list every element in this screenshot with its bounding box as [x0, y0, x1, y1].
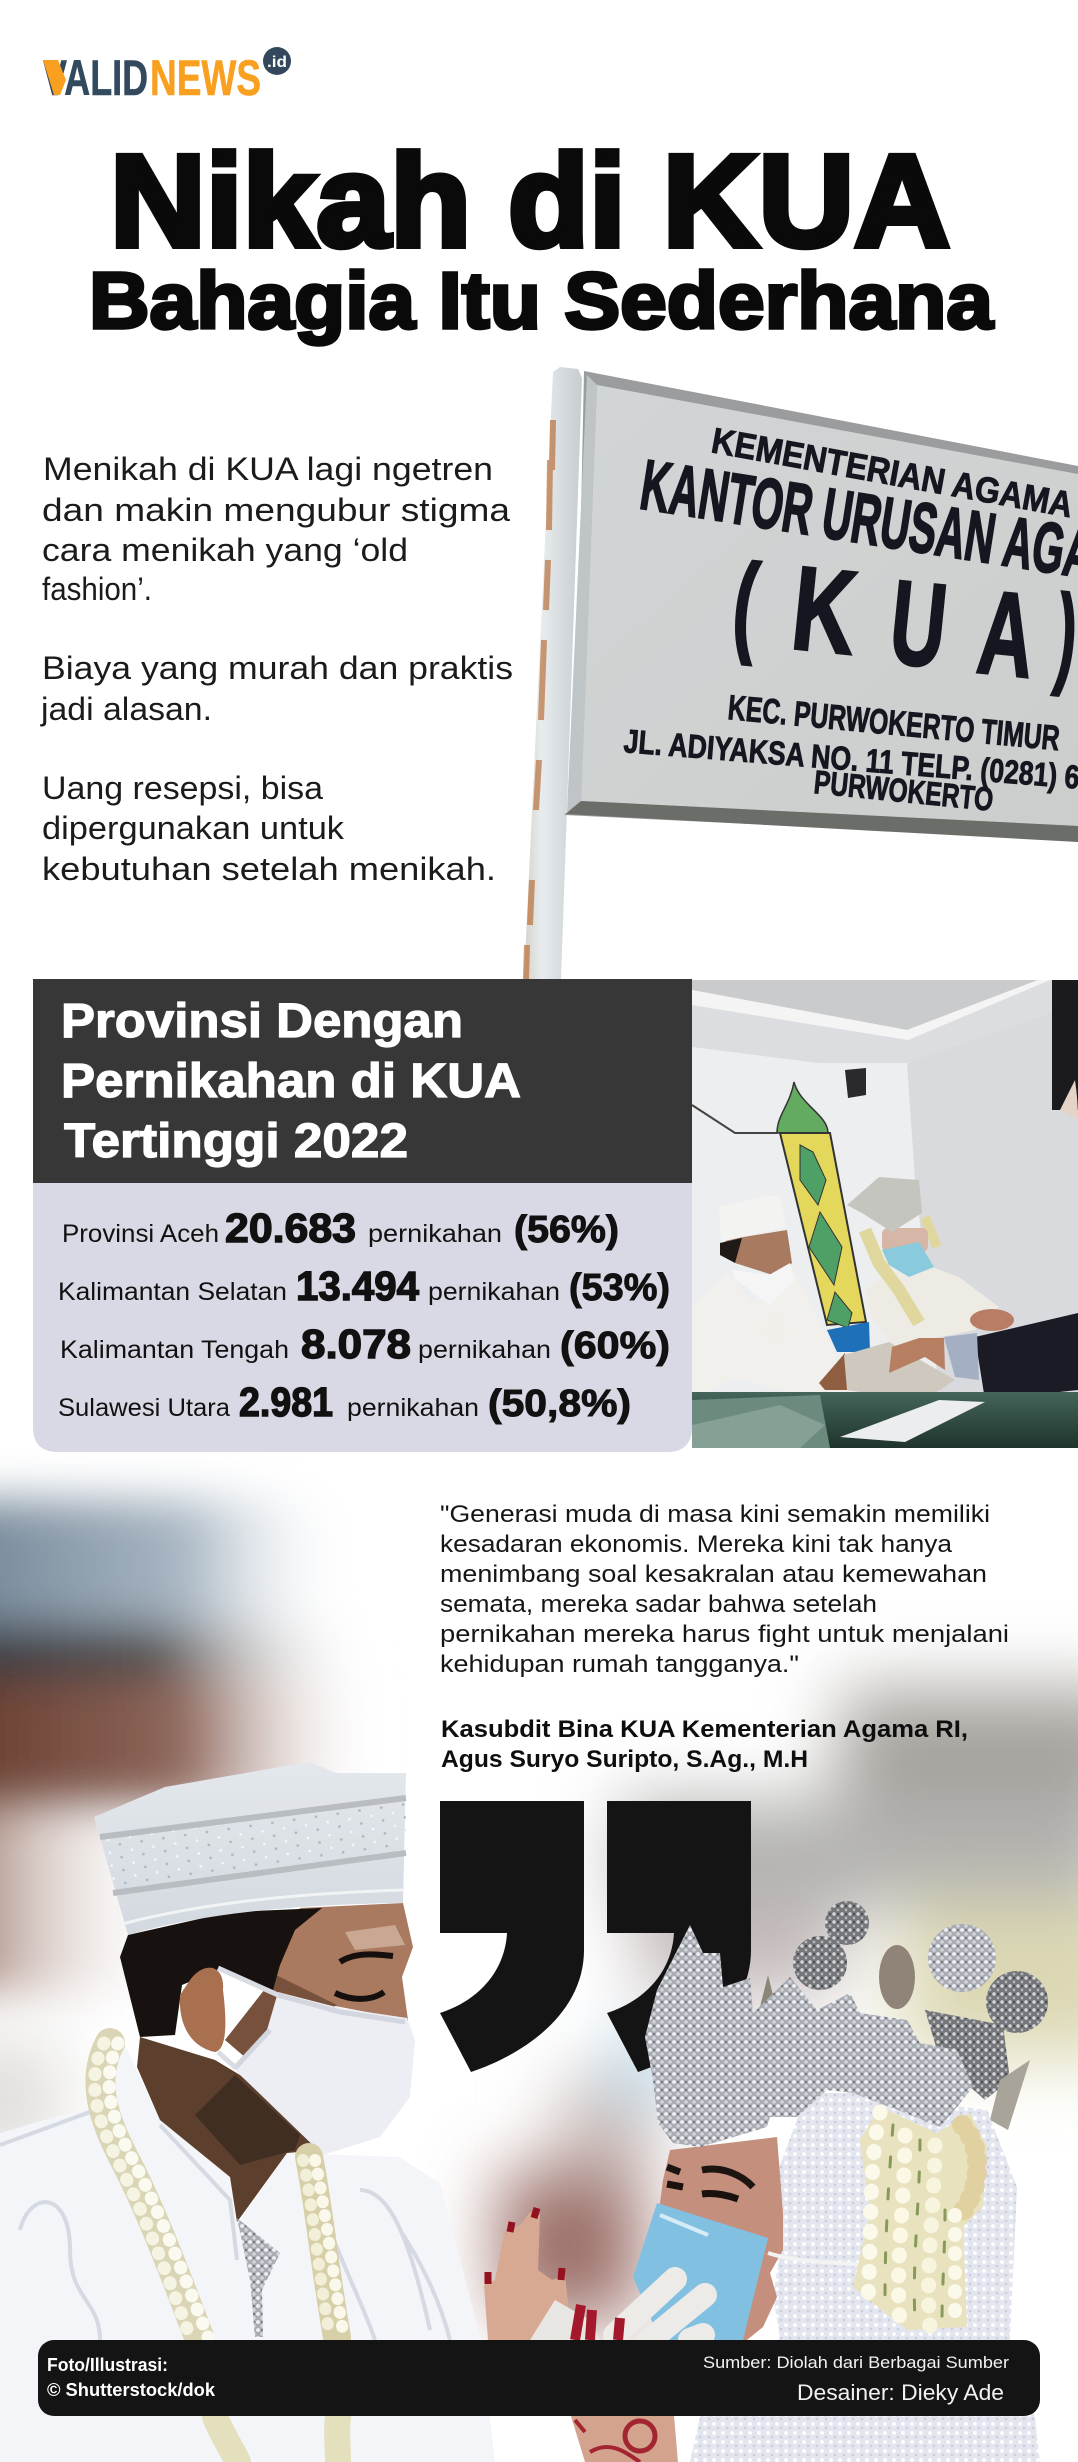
brooch — [237, 2218, 280, 2337]
quote text: menimbang soal kesakralan atau kemewahan — [440, 1561, 987, 1588]
quote text: kesadaran ekonomis. Mereka kini tak hanya — [440, 1531, 953, 1558]
face — [660, 2137, 783, 2340]
row: Kalimantan Tengah: pernikahan — [418, 1336, 551, 1364]
row: Kalimantan Selatan: Kalimantan Selatan — [58, 1278, 287, 1306]
logo: Validnews.id — [43, 47, 291, 106]
beard shadow — [195, 2075, 300, 2165]
photo: groom — [0, 1762, 495, 2462]
row: Kalimantan Selatan: (53%) — [569, 1267, 670, 1309]
intro text block: dan makin mengubur stigma — [42, 492, 510, 528]
panel: provinces data — [33, 1183, 692, 1452]
intro text block — [40, 451, 513, 887]
intro text block: Uang resepsi, bisa — [42, 770, 323, 806]
panel: provinces header: Provinsi Dengan — [61, 995, 463, 1048]
hair ornaments — [758, 1901, 1048, 2130]
table and document — [692, 1392, 1078, 1450]
quote text: kehidupan rumah tangganya." — [440, 1651, 799, 1678]
row: Aceh: 20.683 — [225, 1205, 356, 1251]
photo: bride — [484, 1901, 1048, 2462]
quote text — [440, 1501, 1009, 1678]
panel: provinces header — [33, 979, 692, 1183]
intro text block: dipergunakan untuk — [42, 810, 345, 846]
photo credit: © Shutterstock/dok — [47, 2380, 216, 2400]
row: Sulawesi Utara: pernikahan — [347, 1394, 479, 1422]
gloved hand — [530, 2300, 600, 2340]
row: Sulawesi Utara: Sulawesi Utara — [58, 1394, 230, 1422]
row: Kalimantan Selatan: pernikahan — [428, 1278, 560, 1306]
row: Kalimantan Tengah: 8.078 — [301, 1321, 411, 1367]
eyebrow and eye — [335, 1954, 393, 1999]
row: Kalimantan Tengah: Kalimantan Tengah — [60, 1336, 289, 1364]
clothing — [0, 2045, 495, 2462]
panel: provinces header: Pernikahan di KUA — [61, 1055, 521, 1108]
neck — [137, 2037, 325, 2222]
suit of officiant and hands — [844, 980, 1078, 1402]
row: Kalimantan Tengah: (60%) — [560, 1325, 670, 1367]
mask — [233, 1992, 415, 2155]
speaker — [845, 1068, 866, 1098]
row: Sulawesi Utara — [58, 1379, 631, 1425]
source and designer — [703, 2353, 1009, 2405]
icon: large closing quotation marks — [440, 1801, 751, 2072]
row: Aceh — [62, 1205, 619, 1251]
row: Kalimantan Selatan: 13.494 — [296, 1263, 419, 1309]
minaret ornament — [692, 1082, 866, 1328]
photo: akad in KUA office — [692, 980, 1078, 1450]
groom — [720, 1230, 847, 1390]
bride — [847, 1177, 1014, 1347]
ear — [180, 1968, 225, 2052]
photo credit: Foto/Illustrasi: — [47, 2355, 168, 2375]
hat — [94, 1762, 406, 1935]
crown — [645, 1925, 973, 2147]
logo: Validnews.id: VALID — [43, 50, 148, 106]
hair — [120, 1908, 322, 2037]
intro text block: fashion’. — [42, 571, 152, 607]
intro text block: cara menikah yang ‘old — [42, 532, 408, 568]
row: Sulawesi Utara: 2.981 — [239, 1379, 333, 1425]
intro text block: Menikah di KUA lagi ngetren — [43, 451, 493, 487]
row: Aceh: (56%) — [514, 1209, 619, 1251]
source and designer: Sumber: Diolah dari Berbagai Sumber — [703, 2353, 1009, 2372]
henna hand below bar — [571, 2416, 678, 2462]
quote text: pernikahan mereka harus fight untuk menjalani — [440, 1621, 1009, 1648]
garlands — [95, 2043, 344, 2462]
photo: KUA sign: U — [884, 556, 953, 693]
intro text block: Biaya yang murah dan praktis — [42, 650, 513, 686]
intro text block: kebutuhan setelah menikah. — [42, 851, 496, 887]
quote attribution — [441, 1716, 968, 1773]
panel: provinces header: Tertinggi 2022 — [64, 1115, 408, 1168]
title: Nikah di KUA — [110, 127, 950, 274]
quote attribution: Kasubdit Bina KUA Kementerian Agama RI, — [441, 1716, 968, 1743]
logo: Validnews.id: .id — [267, 54, 287, 71]
row: Kalimantan Selatan — [58, 1263, 670, 1309]
intro text block: jadi alasan. — [40, 691, 212, 727]
source and designer: Desainer: Dieky Ade — [797, 2380, 1004, 2405]
row: Sulawesi Utara: (50,8%) — [488, 1383, 631, 1425]
veil — [690, 2093, 1040, 2462]
quote text: "Generasi muda di masa kini semakin memiliki — [440, 1501, 990, 1528]
quote attribution: Agus Suryo Suripto, S.Ag., M.H — [441, 1746, 808, 1773]
jasmine cluster — [853, 2107, 987, 2330]
row: Kalimantan Tengah — [60, 1321, 670, 1367]
photo: KUA sign: ( — [728, 540, 765, 666]
row: Aceh: Provinsi Aceh — [62, 1220, 219, 1248]
quote text: semata, mereka sadar bahwa setelah — [440, 1591, 877, 1618]
face — [250, 1903, 413, 2020]
raised hand — [484, 2212, 572, 2340]
subtitle: Bahagia Itu Sederhana — [89, 256, 994, 345]
chair — [827, 1322, 870, 1352]
photo: KUA sign — [524, 367, 1078, 979]
photo background: blurred couple — [0, 1500, 1078, 2320]
photo: KUA sign: K — [786, 542, 862, 680]
mask — [633, 2203, 768, 2340]
brow and eye — [667, 2167, 753, 2187]
logo: Validnews.id: NEWS — [150, 50, 261, 106]
footer bar — [38, 2340, 1040, 2416]
row: Aceh: pernikahan — [368, 1220, 502, 1248]
photo: KUA sign: A — [972, 566, 1041, 703]
photo credit — [47, 2355, 216, 2400]
photo: KUA sign: PURWOKERTO — [812, 763, 995, 818]
